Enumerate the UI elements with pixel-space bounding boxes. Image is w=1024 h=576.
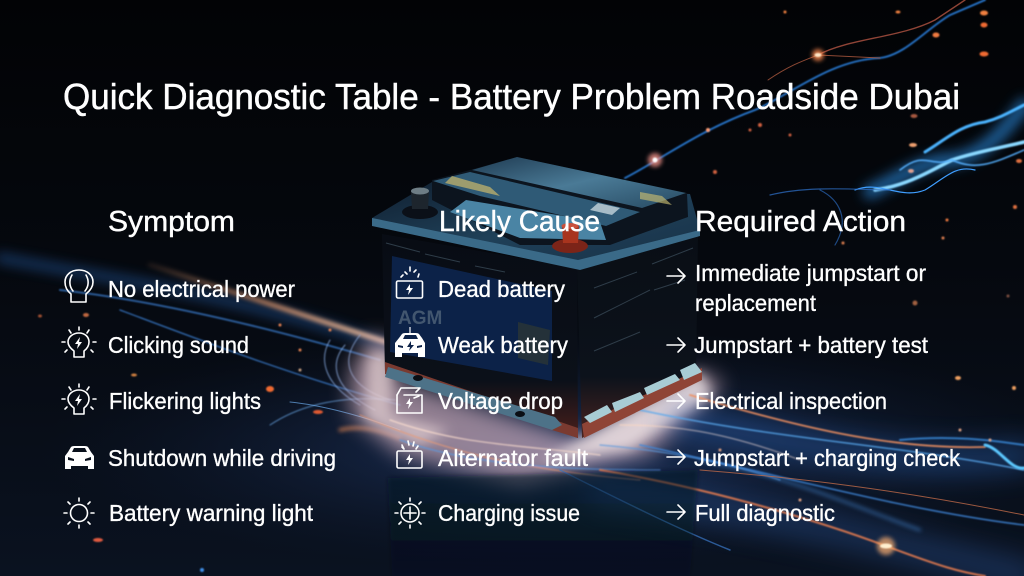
text: immediate jumpstart or replacement: Immediate jumpstart or [695,260,926,286]
text: alternator fault: Alternator fault [438,445,589,471]
text: electrical inspection: Electrical inspection [695,388,887,414]
arrow 3 [667,394,685,408]
column: likely cause [395,206,600,528]
text: weak battery: Weak battery [438,332,568,358]
battery vents [386,243,693,351]
icon: bulb outline [65,270,93,302]
battery body front [382,234,578,438]
icon: sun [64,498,94,528]
battery top face [372,182,700,268]
arrow 5 [667,505,685,519]
terminal positive [552,223,588,253]
battery lid [432,157,688,245]
heading: required action: Required Action [695,206,906,238]
battery label AGM: AGM [398,308,442,329]
text: immediate jumpstart or replacement: replacement [695,290,817,316]
icon: flash bulb [62,327,96,357]
text: flickering lights: Flickering lights [109,388,261,414]
heading: symptom: Symptom [108,206,235,238]
column: symptom [62,206,336,528]
energy streaks left [0,258,400,438]
icon: battery sparks [396,267,422,298]
icon: charging sun [395,498,425,528]
energy streaks right and lightning [560,0,1024,576]
text: no electrical power: No electrical power [108,276,295,302]
text: jumpstart + charging check: Jumpstart + charging check [694,445,960,471]
terminal negative [402,188,438,219]
text: full diagnostic: Full diagnostic [695,500,835,526]
reflection under battery [388,470,698,576]
battery label AGM [390,256,552,381]
text: battery warning light: Battery warning light [109,500,314,526]
battery flanges [385,362,702,438]
arrow 1 [667,269,685,283]
column: required action [667,206,960,526]
text: immediate jumpstart or replacement [695,260,926,316]
icon: open battery [397,388,422,413]
heading: likely cause: Likely Cause [439,206,600,238]
text: voltage drop: Voltage drop [438,388,563,414]
text: clicking sound: Clicking sound [108,332,249,358]
text: jumpstart + battery test: Jumpstart + battery test [694,332,929,358]
title: Quick Diagnostic Table - Battery Problem Roadside Dubai [63,76,960,117]
arrow 2 [667,338,685,352]
battery illustration [372,157,702,438]
icon: car with bolt [395,327,425,357]
text: dead battery: Dead battery [438,276,565,302]
text: charging issue: Charging issue [438,500,580,526]
battery body right [577,234,698,438]
icon: flash bulb 2 [62,384,96,414]
energy glow under battery [350,335,800,485]
text: shutdown while driving: Shutdown while driving [108,445,336,471]
arrow 4 [667,450,685,464]
icon: car [65,446,94,469]
icon: battery fault [397,441,422,468]
